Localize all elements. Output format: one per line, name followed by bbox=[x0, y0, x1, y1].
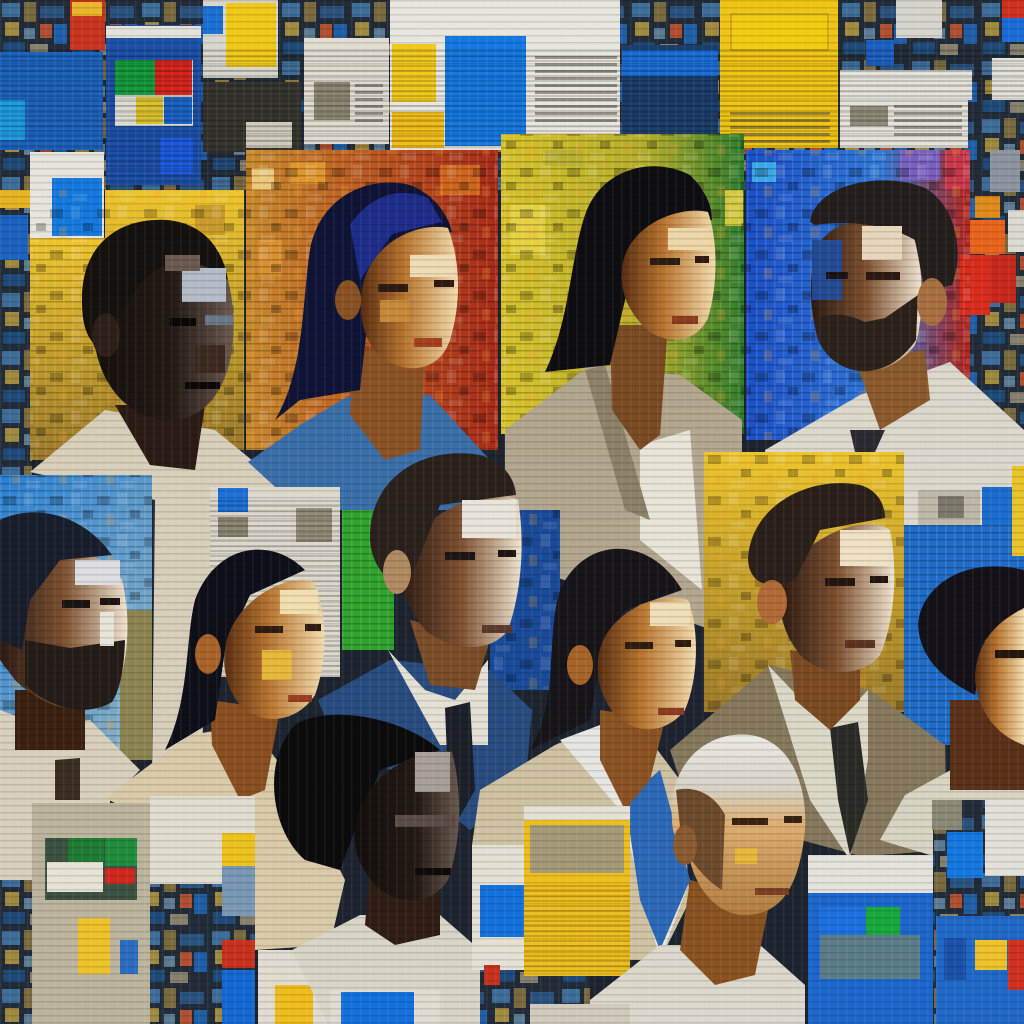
person: back row man, dark skin bbox=[30, 220, 285, 780]
person: front bald man bbox=[590, 734, 805, 1024]
person: back row woman, grey blazer bbox=[505, 166, 742, 640]
panel: bottom centre blue tile bbox=[330, 990, 630, 1024]
person: middle row man, left bbox=[0, 512, 140, 880]
panel: yellow frame behind man bbox=[704, 452, 1024, 745]
person: middle row woman bbox=[105, 550, 345, 950]
panel: right edge tiles bbox=[968, 100, 1024, 460]
panel: bottom right tiles bbox=[808, 800, 1024, 1024]
panel: middle document tile bbox=[210, 487, 394, 677]
panel: yellow-green backdrop bbox=[501, 134, 744, 434]
panel: middle blue tile bbox=[490, 510, 560, 690]
person: middle row woman, right bbox=[472, 549, 696, 960]
panel: left edge tiles bbox=[0, 150, 104, 480]
person: far right woman bbox=[880, 566, 1024, 855]
person: middle row man, blue suit bbox=[318, 453, 532, 830]
panel: orange-red backdrop bbox=[246, 150, 498, 450]
person: middle row man, grey suit bbox=[670, 483, 947, 860]
panel: bottom left tiles bbox=[0, 796, 330, 1024]
person: back row man, beard bbox=[765, 180, 1024, 525]
panel: yellow backdrop bbox=[30, 190, 244, 460]
person: back row woman, blue hair bbox=[248, 183, 490, 510]
person: front dark woman bbox=[274, 715, 482, 1024]
panel: top row interface tiles bbox=[0, 0, 1024, 190]
panel: blue-red backdrop bbox=[746, 150, 990, 440]
panel: middle left blue tile bbox=[0, 475, 152, 760]
panel: yellow document tile bbox=[472, 806, 630, 1024]
